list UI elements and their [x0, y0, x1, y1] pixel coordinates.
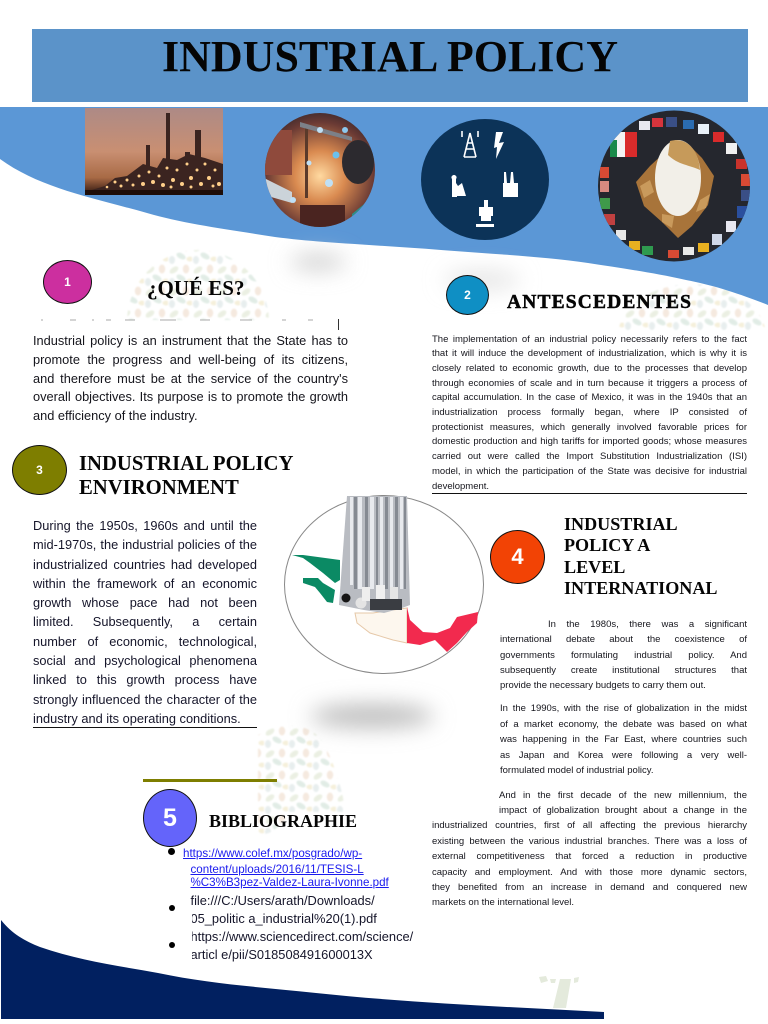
reference 3: [190, 929, 414, 962]
olive rule: [143, 779, 277, 782]
badge 2: [446, 275, 489, 315]
paragraph 3: they benefited from an increase in demand and conquered new: [432, 882, 747, 893]
image: infrastructure icons circle: [421, 119, 549, 240]
paragraph: environment: limited. Subsequently, a certain: [33, 614, 257, 629]
paragraph 1: governments formulating industrial policy. And: [500, 650, 747, 660]
heading: environment: INDUSTRIAL POLICY: [79, 453, 293, 475]
reference 3: https://www.sciencedirect.com/science/: [190, 929, 413, 944]
paragraph 3: existing between the various industrial branches. There was a loss of: [432, 836, 747, 847]
paragraph: environment: mid-1970s, the industrial policies of the: [33, 537, 257, 552]
heading: international: LEVEL: [564, 557, 625, 577]
badge 5: [143, 789, 197, 847]
badge 5: 5: [163, 804, 177, 832]
bibliography list: %C3%B3pez-Valdez-Laura-Ivonne.pdf: [190, 876, 389, 889]
paragraph 2: was happening in the Far East, where countries such: [500, 734, 747, 745]
paragraph: antescedentes: carried out were called the Import Substitution Industrialization (ISI): [432, 451, 747, 462]
paragraph 2: formulated model of industrial policy.: [500, 765, 653, 776]
badge 4: [490, 530, 545, 584]
image: logistics circle: [265, 113, 375, 227]
paragraph: antescedentes: closely related to economic growth, due to the processes that develop: [432, 363, 747, 374]
heading: international: INTERNATIONAL: [564, 578, 718, 598]
title: INDUSTRIAL POLICY: [162, 32, 618, 81]
bibliography list: content/uploads/2016/11/TESIS-L: [190, 863, 364, 876]
icon: oil platform: [476, 200, 494, 227]
bullet three: [169, 942, 175, 948]
paragraph: antescedentes: protectionist measures, which generally involved favorable prices for: [432, 422, 747, 433]
clipping mask: [189, 909, 192, 963]
heading: international: [564, 514, 718, 598]
bullet two: [169, 905, 175, 911]
title banner: [32, 29, 748, 102]
clipped text fragments: [41, 319, 313, 321]
badge 2: 2: [464, 288, 471, 302]
paragraph: environment: linked to this growth process have: [33, 672, 257, 687]
paragraph 3: capacity and employment. And with those more dynamic sectors,: [432, 867, 747, 878]
paragraph: international: [432, 619, 748, 908]
blue wave: [0, 107, 768, 305]
heading: international: POLICY A: [564, 535, 650, 555]
paragraph: que es: promote the progress and well-being of its citizens,: [33, 352, 348, 367]
foliage decorations: [127, 250, 766, 834]
paragraph 2: [500, 703, 747, 776]
map: white region: [355, 608, 407, 643]
paragraph 1: provide the necessary budgets to carry them out.: [500, 680, 706, 691]
paragraph: environment: number of economic, technological,: [33, 634, 257, 649]
paragraph: que es: and efficiency of the industry.: [33, 408, 198, 423]
paragraph 1: subsequently create institutional structures that: [500, 665, 747, 676]
navy wave: [1, 920, 604, 1019]
heading: environment: ENVIRONMENT: [79, 477, 239, 499]
paragraph: que es: [33, 333, 348, 423]
paragraph: antescedentes: The implementation of an industrial policy necessarily refers to the fact: [432, 334, 747, 344]
map: red region: [407, 607, 478, 652]
paragraph 3: markets on the international level.: [432, 897, 574, 908]
badge 3: [12, 445, 67, 495]
paragraph: environment: within the framework of an economic: [33, 576, 257, 591]
reference 3: articl e/pii/S018508491600013X: [190, 946, 373, 962]
paragraph 1: international debate about the coexistence of: [500, 634, 747, 645]
heading: international: INDUSTRIAL: [564, 514, 678, 534]
paragraph 2: as Japan and Korea were following a very well-: [500, 750, 747, 760]
soft shadows: [290, 254, 520, 728]
paragraph: environment: [33, 516, 257, 728]
paragraph: antescedentes: model, in which the participation of the State was decisive for industrial: [432, 466, 747, 477]
icon: factory: [503, 172, 518, 197]
image: flags and globe circle: [598, 110, 750, 262]
paragraph 3: impact of globalization brought about a change in the: [499, 805, 747, 816]
link 1: [183, 847, 389, 889]
map: green region: [292, 555, 340, 603]
paragraph: antescedentes: that it will induce the development of industrialization, which is why it is: [432, 348, 747, 359]
paragraph 1: [500, 619, 748, 691]
paragraph 2: of a market economy, the debate was based on what: [500, 718, 747, 730]
paragraph 3: external competitiveness that forced a reduction in productive: [432, 851, 747, 862]
paragraph: antescedentes: development.: [432, 481, 489, 492]
paragraph 3: industrialized countries, first of all affecting the previous hierarchy: [432, 820, 747, 831]
badge 4: 4: [511, 544, 524, 569]
heading: antescedentes: ANTESCEDENTES: [507, 292, 692, 313]
paragraph 3: [432, 790, 748, 908]
paragraph 2: In the 1990s, with the rise of globalization in the midst: [500, 703, 747, 714]
heading: bibliographie: BIBLIOGRAPHIE: [209, 811, 357, 831]
reference 2: 05_politic a_industrial%20(1).pdf: [190, 911, 377, 926]
paragraph: antescedentes: [432, 332, 747, 494]
heading: que es: ¿QUÉ ES?: [147, 276, 244, 300]
paragraph: environment: industry and its operating conditions.: [33, 711, 241, 726]
tree mark bottom: [539, 976, 579, 1008]
paragraph: environment: During the 1950s, 1960s and until the: [33, 518, 257, 533]
badge 3: 3: [36, 463, 43, 477]
image: Mexico map circle: [284, 495, 484, 674]
paragraph: antescedentes: through economies of scale and in turn because it triggers a process of: [432, 378, 747, 389]
paragraph 3: And in the first decade of the new millennium, the: [499, 790, 747, 800]
image: refinery photo: [85, 108, 223, 195]
heading: environment: [79, 453, 294, 499]
badge 1: [43, 260, 92, 304]
text fragment marker: [338, 319, 339, 330]
icon: lightning: [494, 132, 504, 159]
icon: worker: [452, 175, 466, 197]
paragraph: environment: growth whose pace had not been: [33, 595, 257, 610]
paragraph: environment: social and psychological phenomena: [33, 653, 257, 668]
paragraph: antescedentes: industrialization process formally began, where IP consisted of: [432, 407, 747, 418]
paragraph: antescedentes: domestic production and high tariffs for imported goods; whose measures: [432, 436, 747, 447]
badge 1: 1: [64, 275, 71, 289]
reference 2: [190, 893, 377, 926]
bibliography list: [168, 847, 414, 962]
paragraph: antescedentes: capital accumulation. In the case of Mexico, it was in the 1940s that an: [432, 392, 747, 403]
paragraph: que es: overall objectives. Its purpose is to promote the growth: [33, 389, 348, 404]
paragraph: que es: and therefore must be at the service of the country's: [33, 370, 348, 386]
paragraph: environment: industrialized countries had developed: [33, 557, 257, 572]
paragraph 1: In the 1980s, there was a significant: [548, 619, 747, 630]
link 1: https://www.colef.mx/posgrado/wp-: [183, 847, 362, 860]
reference 2: file:///C:/Users/arath/Downloads/: [190, 893, 375, 908]
paragraph: que es: Industrial policy is an instrument that the State has to: [33, 333, 348, 348]
pillars: [339, 496, 410, 613]
icon: tower: [462, 131, 478, 157]
paragraph: environment: strongly influenced the character of the: [33, 692, 257, 707]
bullet one: [168, 848, 175, 855]
